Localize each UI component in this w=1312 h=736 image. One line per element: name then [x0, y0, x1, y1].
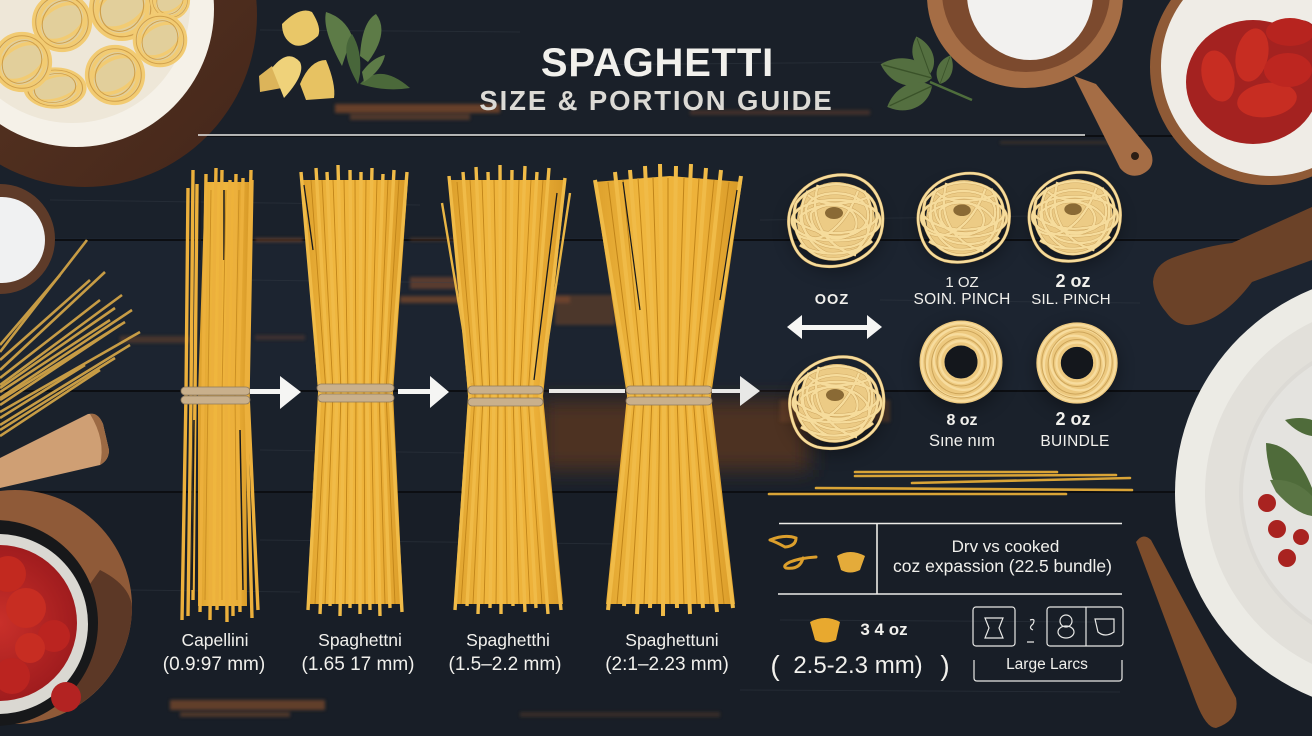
prop: salt bowl left — [0, 184, 55, 294]
nest: 2 oz pinch: 2 oz — [1055, 271, 1091, 291]
prop: pasta shells and basil top centre — [259, 10, 410, 100]
label: spaghetti: Spaghetthi — [466, 630, 550, 650]
prop: wooden spoon with salt — [927, 0, 1152, 176]
bundle: spaghettini — [301, 165, 408, 616]
bundle: capellini — [181, 168, 258, 622]
nest: 1 oz: 1 OZ — [945, 274, 979, 291]
nest: 2 oz bundle: BUINDLE — [1040, 433, 1110, 450]
text: dry vs cooked: coz expassion (22.5 bundle) — [893, 556, 1112, 576]
label: capellini — [163, 630, 265, 675]
label: capellini: Capellini — [181, 630, 249, 650]
prop: sauce bowl on board bottom left — [0, 490, 132, 726]
twine tie — [317, 384, 394, 402]
twine tie — [181, 387, 250, 404]
nest: 2 oz pinch: SIL. PINCH — [1031, 291, 1111, 308]
bundle: spaghetti — [442, 165, 570, 614]
label: spaghettini — [302, 630, 414, 675]
text: large size box — [974, 656, 1122, 681]
nest: 8 oz: 8 oz — [946, 412, 978, 429]
prop: rolling pin — [0, 414, 109, 488]
label: spaghettuni — [605, 630, 729, 675]
icon: small cup pasta — [837, 552, 865, 572]
icon: ridged cup pasta — [810, 618, 840, 642]
label: spaghettuni: (2:1–2.23 mm) — [605, 654, 729, 675]
nest: 0 oz: OOZ — [815, 292, 849, 308]
nest: 2 oz pinch — [1029, 172, 1120, 308]
arrow: spaghettini to spaghetti — [398, 376, 449, 408]
prop: wooden spatula right — [1153, 207, 1312, 325]
nest: 1 oz: SOIN. PINCH — [914, 291, 1010, 308]
size note — [770, 618, 950, 681]
prop: plate of pasta nests top left — [0, 0, 257, 187]
label: spaghettuni: Spaghettuni — [625, 630, 719, 650]
nest: lower left — [790, 357, 884, 453]
nest: 2 oz bundle — [1031, 316, 1123, 450]
size note: 2.5-2.3 mm) — [793, 652, 923, 679]
size note: ) — [940, 650, 950, 681]
label: spaghettini: Spaghettni — [318, 630, 402, 650]
double arrow — [787, 315, 882, 339]
prop: bowl of sauce top right — [1150, 0, 1312, 185]
text: large size box: Large Larcs — [1006, 656, 1088, 673]
twine tie — [468, 386, 543, 406]
label: capellini: (0.9:97 mm) — [163, 654, 265, 675]
text: dry vs cooked: Drv vs cooked — [952, 537, 1059, 556]
label: spaghetti: (1.5–2.2 mm) — [449, 654, 561, 675]
loose spaghetti strands — [769, 472, 1132, 494]
prop: loose spaghetti left — [0, 240, 140, 436]
nest: 2 oz bundle: 2 oz — [1055, 409, 1091, 429]
nest: 1 oz — [914, 173, 1010, 308]
size note: ( — [770, 650, 780, 681]
prop: white plate with basil and berries right — [1175, 273, 1312, 713]
nest: 8 oz — [914, 314, 1008, 450]
twine tie — [626, 386, 712, 405]
label: spaghetti — [449, 630, 561, 675]
title — [479, 41, 834, 116]
nest: 8 oz: Sıne nım — [929, 432, 995, 450]
arrow: capellini to spaghettini — [250, 376, 301, 409]
prop: basil leaves top right — [877, 33, 972, 118]
size note: 3 4 oz — [860, 620, 908, 639]
arrow: spaghetti to spaghettuni — [549, 376, 760, 406]
icon: pasta curls — [770, 536, 816, 568]
title: SPAGHETTI — [541, 41, 774, 85]
label: spaghettini: (1.65 17 mm) — [302, 654, 414, 675]
icons: size boxes — [973, 607, 1123, 646]
nest: 0 oz — [789, 175, 883, 308]
prop: wooden stick bottom right — [1136, 536, 1237, 728]
bundle: spaghettuni — [594, 164, 742, 616]
text: dry vs cooked — [893, 537, 1112, 576]
subtitle: SIZE & PORTION GUIDE — [479, 85, 834, 116]
panel: dry vs cooked — [770, 524, 1122, 594]
